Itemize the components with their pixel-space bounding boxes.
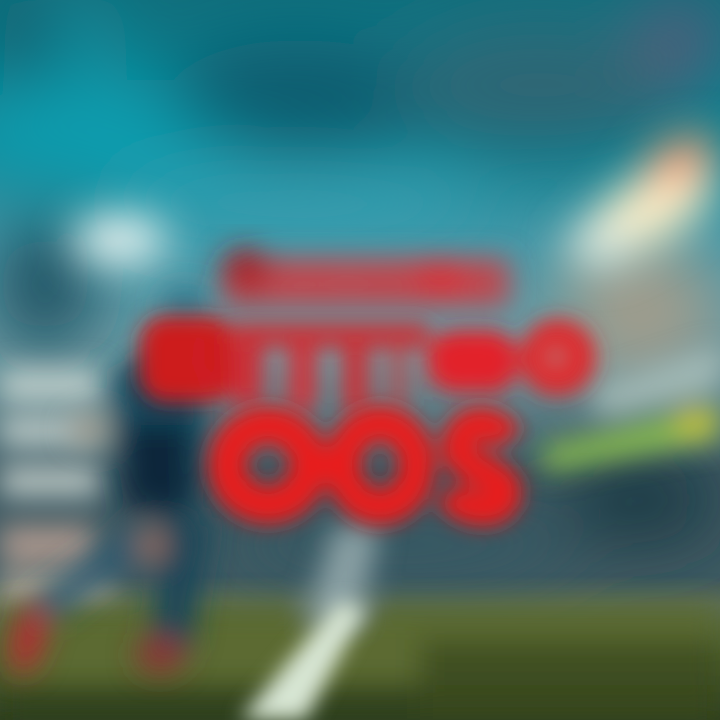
title line 1 [221, 248, 510, 308]
floodlight glows [72, 125, 720, 273]
title line 3 [215, 423, 525, 537]
stands on the right with green board [540, 348, 720, 472]
title: batting odds [140, 248, 596, 537]
player silhouette [5, 289, 212, 677]
stands on the left [0, 370, 110, 604]
white pitch line [240, 600, 365, 720]
title line 1: PREMIER [226, 258, 506, 305]
pitch [0, 525, 720, 720]
title line 2: BATTING [143, 316, 593, 418]
